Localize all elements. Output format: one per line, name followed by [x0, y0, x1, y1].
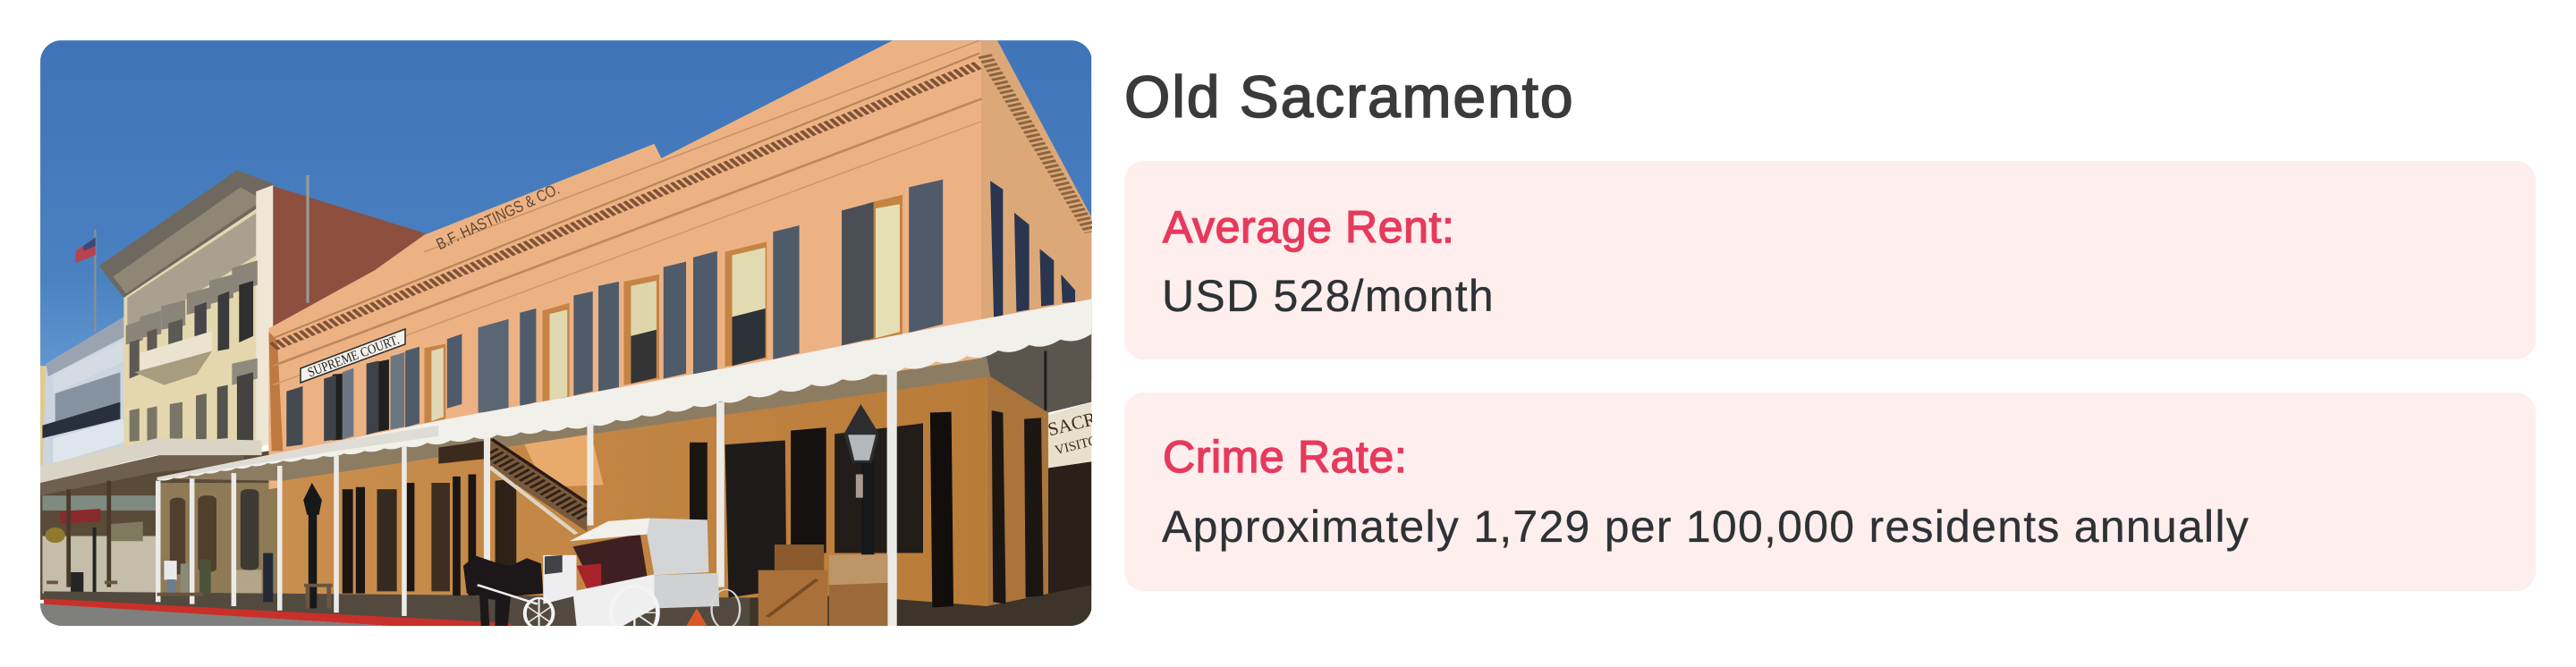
- sign: B.F. Hastings & Co.: B.F. HASTINGS & CO.: [433, 180, 563, 253]
- staircase: [438, 438, 587, 534]
- ground floor wall: [157, 327, 1091, 626]
- flag: [76, 230, 97, 332]
- panel: crime rate: [1124, 393, 2536, 591]
- title: Old Sacramento: [1124, 63, 1574, 130]
- sign: Visitors center: [1048, 413, 1092, 454]
- ground floor doors and dark shutters: [343, 410, 1043, 607]
- building: brick wall: [273, 186, 426, 326]
- building: B.F. Hastings upper facade: [269, 40, 1091, 489]
- building: cream Italianate facade: [99, 170, 274, 447]
- label: crime rate: Crime Rate:: [1163, 432, 1407, 482]
- panel: average rent: [1124, 161, 2536, 359]
- building: far left white and blue: [40, 317, 126, 477]
- carriage: [476, 519, 741, 626]
- windows and shutters: [286, 180, 1075, 447]
- photo: Old Sacramento street with B.F. Hastings building: [40, 40, 1092, 626]
- benches: [47, 580, 333, 608]
- sky: [40, 40, 1091, 381]
- people: [164, 553, 273, 602]
- horse: [463, 555, 543, 626]
- side wall: [982, 40, 1091, 349]
- building: left arcade and ground level: [40, 438, 283, 600]
- visitor sign: [1048, 402, 1091, 468]
- wooden crates: [758, 545, 887, 626]
- sidewalk, curb and road: [40, 585, 1091, 626]
- label: average rent: Average Rent:: [1163, 202, 1455, 252]
- awning posts: [156, 369, 897, 626]
- street lamps: [303, 404, 879, 626]
- value: crime rate: Approximately 1,729 per 100,000 residents annually: [1162, 502, 2250, 552]
- sign: Supreme Court: SUPREME COURT.: [306, 333, 402, 380]
- value: average rent: USD 528/month: [1162, 271, 1495, 321]
- awning: [157, 299, 1091, 480]
